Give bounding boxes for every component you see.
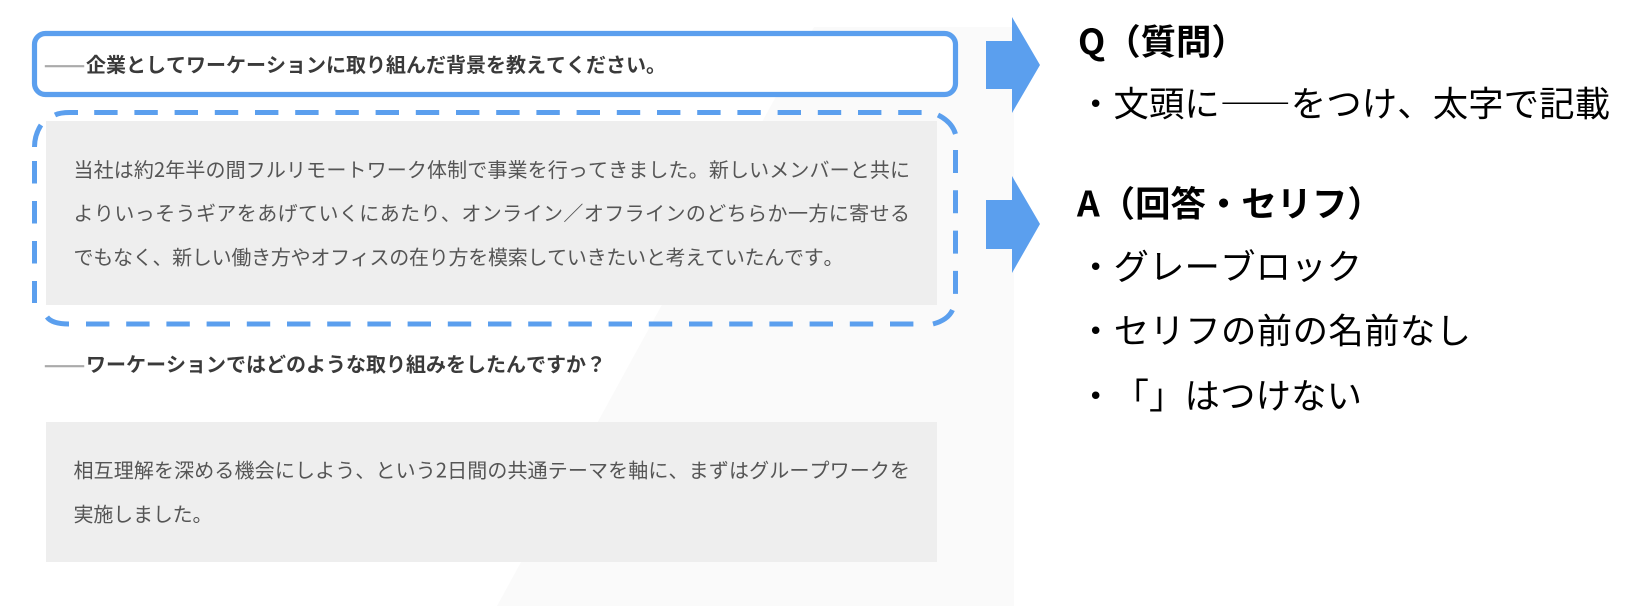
- answer 1 text: でもなく、新しい働き方やオフィスの在り方を模索していきたいと考えていたんです。: [74, 242, 844, 271]
- A rule list: ・セリフの前の名前なし: [1078, 304, 1471, 354]
- dashed highlight around answer: [34, 112, 956, 324]
- answer 1 text: [74, 154, 910, 271]
- panel: answer block 2: [46, 422, 937, 562]
- A rule list: [1078, 240, 1471, 420]
- question 1 text: ——: [44, 46, 85, 81]
- arrow: question to Q notes: [986, 17, 1040, 113]
- answer 1 text: よりいっそうギアをあげていくにあたり、オンライン／オフラインのどちらか一方に寄せる: [74, 198, 910, 227]
- answer 1 text: 当社は約2年半の間フルリモートワーク体制で事業を行ってきました。新しいメンバーと共に: [74, 154, 910, 183]
- answer 2 text: 実施しました。: [74, 499, 212, 528]
- panel: answer block 1: [46, 121, 937, 305]
- arrow: answer to A notes: [986, 176, 1040, 273]
- panel: question highlight box: [34, 34, 956, 94]
- answer 2 text: [74, 455, 910, 528]
- A heading: A（回答・セリフ）: [1076, 176, 1383, 228]
- question 2 text: ワーケーションではどのような取り組みをしたんですか？: [86, 349, 606, 378]
- Q rule text: ・文頭に——をつけ、太字で記載: [1078, 76, 1610, 128]
- A rule list: ・グレーブロック: [1078, 240, 1362, 290]
- background slanted panel: [497, 27, 1014, 606]
- answer 2 text: 相互理解を深める機会にしよう、という2日間の共通テーマを軸に、まずはグループワークを: [74, 455, 910, 484]
- question 1 text: 企業としてワーケーションに取り組んだ背景を教えてください。: [86, 49, 666, 78]
- A rule list: ・「」はつけない: [1078, 368, 1362, 420]
- Q heading: Q（質問）: [1078, 14, 1247, 66]
- question 2 text: ——: [44, 346, 85, 381]
